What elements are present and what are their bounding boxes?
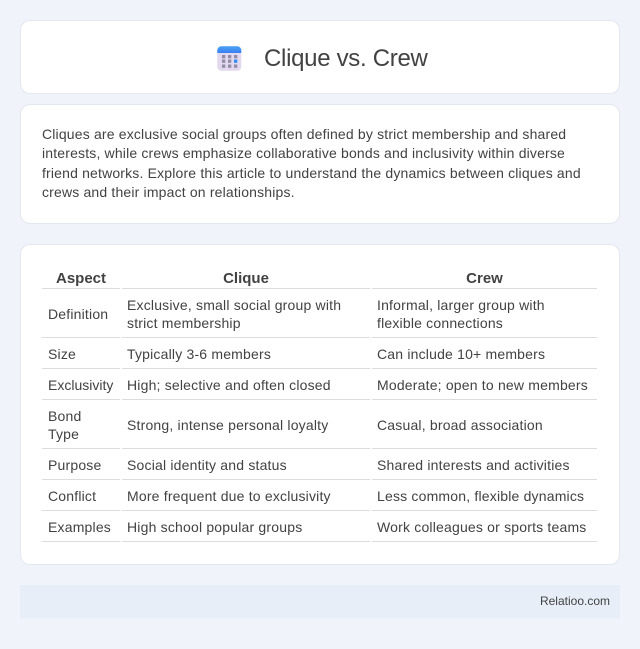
table: Purpose — [48, 457, 101, 473]
table: Can include 10+ members — [377, 346, 545, 362]
table: flexible connections — [377, 315, 503, 331]
table: Examples — [48, 519, 111, 535]
table: Bond — [48, 408, 81, 424]
row: Bond Type — [48, 408, 543, 442]
intro text: interests, while crews emphasize collaborative bonds and inclusivity within diverse — [42, 145, 565, 161]
table: Shared interests and activities — [377, 457, 570, 473]
table: Work colleagues or sports teams — [377, 519, 586, 535]
row: Definition — [48, 297, 545, 331]
row: Purpose — [48, 457, 570, 473]
table: strict membership — [127, 315, 241, 331]
footer — [20, 585, 620, 618]
intro card — [20, 104, 620, 224]
title card — [20, 20, 620, 94]
table: Definition — [48, 306, 108, 322]
table: High school popular groups — [127, 519, 302, 535]
table: Casual, broad association — [377, 417, 543, 433]
table: Moderate; open to new members — [377, 377, 588, 393]
row: Exclusivity — [48, 377, 588, 393]
header: Crew: Crew — [466, 270, 503, 287]
table: Social identity and status — [127, 457, 287, 473]
intro text — [42, 126, 581, 200]
icon: calendar — [217, 46, 242, 71]
table: High; selective and often closed — [127, 377, 331, 393]
row: Conflict — [48, 488, 584, 504]
header: Aspect: Aspect — [56, 270, 106, 287]
table: Exclusivity — [48, 377, 113, 393]
table: Typically 3-6 members — [127, 346, 271, 362]
table: More frequent due to exclusivity — [127, 488, 331, 504]
title: Clique vs. Crew — [264, 45, 428, 72]
footer text: Relatioo.com — [540, 594, 610, 608]
table: Exclusive, small social group with — [127, 297, 341, 313]
header: Clique: Clique — [223, 270, 269, 287]
table: Size — [48, 346, 76, 362]
row: Examples — [48, 519, 586, 535]
intro text: friend networks. Explore this article to understand the dynamics between cliques and — [42, 165, 581, 181]
table: Type — [48, 426, 79, 442]
intro text: Cliques are exclusive social groups often defined by strict membership and shared — [42, 126, 566, 142]
table: Strong, intense personal loyalty — [127, 417, 328, 433]
row: Size — [48, 346, 545, 362]
table: Conflict — [48, 488, 96, 504]
intro text: crews and their impact on relationships. — [42, 184, 295, 200]
table: Less common, flexible dynamics — [377, 488, 584, 504]
table card — [20, 244, 620, 565]
table: Informal, larger group with — [377, 297, 545, 313]
